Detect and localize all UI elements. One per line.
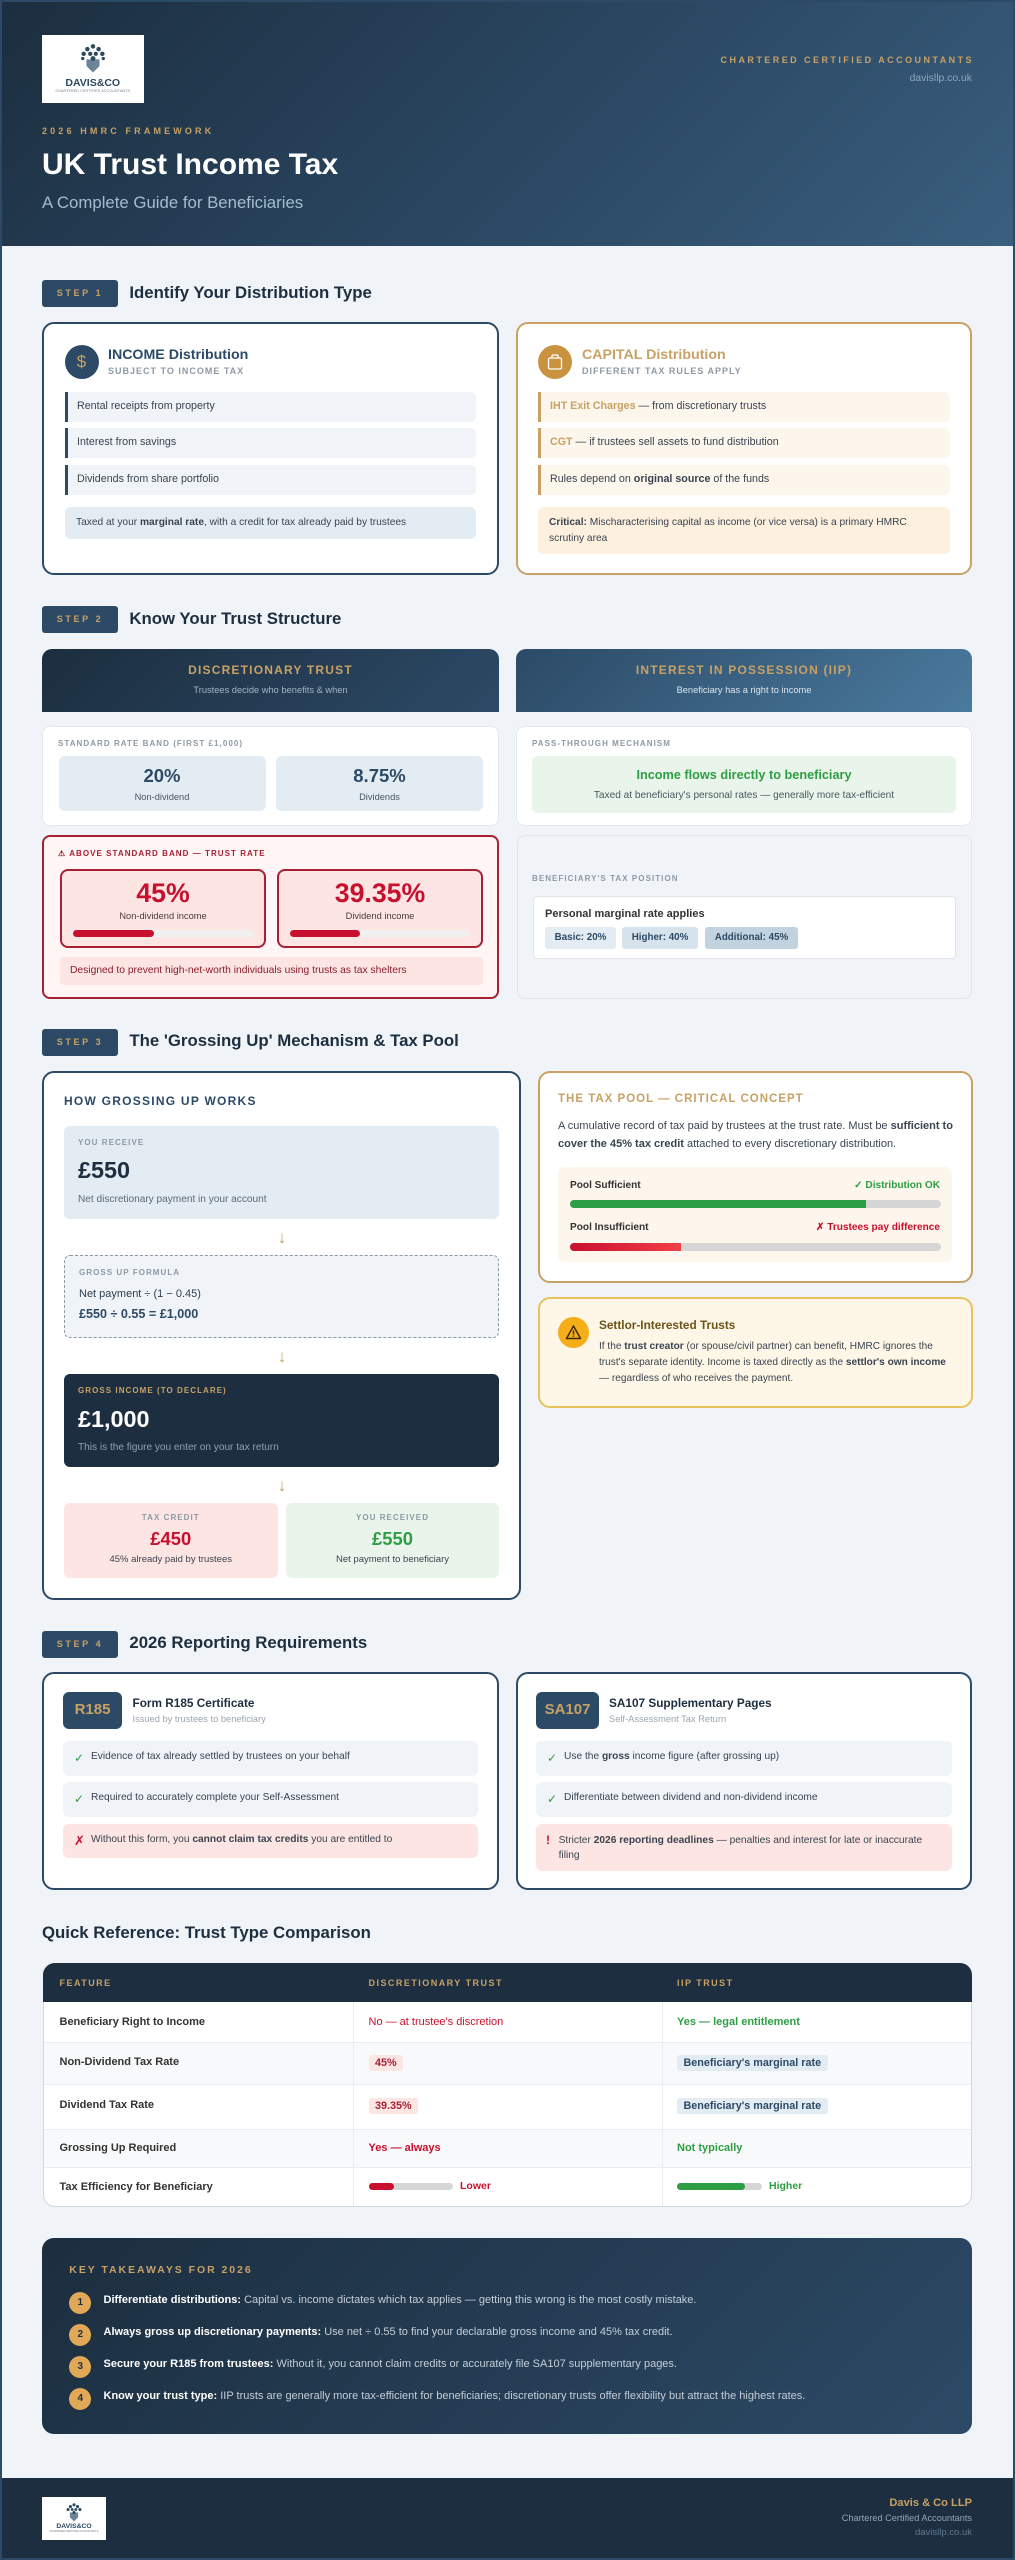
step 1 badge: STEP 1 bbox=[57, 288, 103, 298]
row: dividend rate: Dividend Tax Rate bbox=[60, 2099, 154, 2111]
item: Without this form, you cannot claim tax credits you are entitled to bbox=[91, 1834, 392, 1844]
item bbox=[538, 392, 950, 422]
income note bbox=[65, 507, 476, 539]
row: grossing up: Yes — always bbox=[368, 2142, 441, 2154]
heading: THE TAX POOL — CRITICAL CONCEPT bbox=[558, 1093, 804, 1105]
panel: standard rate band bbox=[42, 726, 499, 826]
stat: 45%: 45% bbox=[136, 878, 190, 908]
panel: SA107 bbox=[516, 1672, 972, 1890]
status: ✗ Trustees pay difference bbox=[816, 1222, 940, 1233]
arrow: ↓ bbox=[278, 1476, 286, 1495]
row: non-dividend rate bbox=[60, 2055, 828, 2071]
panel: capital distribution bbox=[516, 322, 972, 575]
capital subheading: DIFFERENT TAX RULES APPLY bbox=[582, 366, 742, 376]
step: gross income: GROSS INCOME (TO DECLARE) bbox=[78, 1386, 227, 1394]
website: davisllp.co.uk bbox=[915, 2527, 972, 2538]
pool meter bbox=[558, 1166, 952, 1262]
item: Interest from savings bbox=[77, 436, 176, 448]
item bbox=[63, 1741, 478, 1776]
logo wordmark: DAVIS&CO bbox=[65, 77, 120, 89]
eyebrow: 2026 HMRC FRAMEWORK bbox=[42, 126, 214, 136]
chip: Higher: 40% bbox=[632, 932, 688, 943]
result: tax credit: £450 bbox=[150, 1528, 191, 1549]
step 3 badge bbox=[42, 1029, 118, 1056]
income subheading: SUBJECT TO INCOME TAX bbox=[108, 366, 244, 376]
takeaway 2: Always gross up discretionary payments: Use net ÷ 0.55 to find your declarable gross income and 45% tax credit. bbox=[104, 2326, 673, 2338]
result: you received: YOU RECEIVED bbox=[356, 1513, 429, 1522]
label: Pool Sufficient bbox=[570, 1180, 641, 1190]
item: Required to accurately complete your Self-Assessment bbox=[91, 1792, 339, 1803]
panel: beneficiary tax position bbox=[517, 835, 972, 999]
stat: 45% bbox=[60, 869, 266, 948]
bar: higher bbox=[677, 2183, 762, 2190]
step: formula bbox=[64, 1255, 499, 1338]
item bbox=[63, 1824, 478, 1858]
row stripe bbox=[44, 2128, 971, 2168]
step 1 badge bbox=[42, 280, 118, 307]
form title: SA107 Supplementary Pages bbox=[609, 1696, 772, 1710]
bar: insufficient bbox=[570, 1242, 940, 1250]
form subtitle: Self-Assessment Tax Return bbox=[609, 1714, 726, 1724]
row: dividend rate: Beneficiary's marginal rate bbox=[684, 2100, 821, 2112]
item: Use the gross income figure (after grossing up) bbox=[564, 1751, 779, 1762]
panel: iip header bbox=[516, 649, 972, 712]
note: Designed to prevent high-net-worth individuals using trusts as tax shelters bbox=[70, 965, 407, 976]
item bbox=[536, 1824, 952, 1870]
step 2 badge: STEP 2 bbox=[57, 614, 103, 624]
label: ⚠ ABOVE STANDARD BAND — TRUST RATE bbox=[58, 849, 266, 858]
column rule bbox=[352, 2002, 354, 2206]
subheading: Beneficiary has a right to income bbox=[677, 685, 811, 695]
step 4 badge: STEP 4 bbox=[57, 1638, 103, 1648]
label: BENEFICIARY'S TAX POSITION bbox=[532, 874, 679, 883]
takeaway 2 bbox=[69, 2324, 673, 2346]
row: efficiency bbox=[60, 2180, 802, 2193]
header row: IIP TRUST bbox=[677, 1978, 734, 1988]
step: formula: £550 ÷ 0.55 = £1,000 bbox=[79, 1307, 198, 1321]
step: you receive: £550 bbox=[78, 1157, 130, 1183]
stat: 45%: Non-dividend income bbox=[119, 911, 207, 921]
strapline: CHARTERED CERTIFIED ACCOUNTANTS bbox=[50, 2530, 98, 2533]
stat: 8.75%: 8.75% bbox=[353, 765, 406, 786]
row: right to income: No — at trustee's discretion bbox=[368, 2016, 503, 2028]
step: you receive: Net discretionary payment in your account bbox=[78, 1194, 267, 1205]
callout: income flows bbox=[532, 756, 956, 813]
critical note bbox=[538, 507, 950, 554]
bar: lower bbox=[368, 2183, 453, 2190]
capital heading: CAPITAL Distribution bbox=[582, 347, 726, 363]
result: tax credit: TAX CREDIT bbox=[142, 1513, 200, 1522]
label: PASS-THROUGH MECHANISM bbox=[532, 739, 671, 748]
icon: dollar: $ bbox=[77, 352, 86, 371]
row: non-dividend rate: Beneficiary's marginal rate bbox=[684, 2057, 821, 2069]
header row bbox=[43, 1963, 972, 2002]
form badge: SA107 bbox=[545, 1701, 590, 1718]
chip bbox=[705, 927, 798, 949]
takeaway 3: 3 bbox=[78, 2361, 83, 2372]
subheading: Trustees decide who benefits & when bbox=[193, 685, 348, 695]
arrow: ↓ bbox=[278, 1228, 286, 1247]
step: gross income: £1,000 bbox=[78, 1406, 150, 1432]
header row: FEATURE bbox=[60, 1978, 112, 1988]
status: ✓ Distribution OK bbox=[854, 1180, 940, 1190]
income note: Taxed at your marginal rate, with a credit for tax already paid by trustees bbox=[76, 517, 406, 528]
footer bbox=[0, 2478, 1015, 2560]
item: Evidence of tax already settled by trustees on your behalf bbox=[91, 1751, 350, 1762]
takeaway 3: Secure your R185 from trustees: Without it, you cannot claim credits or accurately file SA107 supplementary pages. bbox=[104, 2358, 677, 2370]
heading: KEY TAKEAWAYS FOR 2026 bbox=[69, 2264, 253, 2276]
takeaway 4: 4 bbox=[78, 2393, 83, 2404]
result: you received: £550 bbox=[372, 1528, 413, 1549]
row: efficiency: Tax Efficiency for Beneficiary bbox=[60, 2181, 213, 2193]
panel: above standard band bbox=[42, 835, 499, 999]
note bbox=[60, 957, 483, 985]
stat: 8.75% bbox=[276, 756, 483, 811]
takeaway 2: 2 bbox=[78, 2328, 83, 2340]
step: gross income bbox=[64, 1374, 499, 1467]
row: right to income: Beneficiary Right to Income bbox=[60, 2016, 205, 2028]
chip: Basic: 20% bbox=[555, 932, 606, 943]
step 2 heading: Know Your Trust Structure bbox=[129, 609, 341, 628]
row stripe bbox=[44, 2042, 971, 2085]
row: non-dividend rate: Non-Dividend Tax Rate bbox=[60, 2056, 179, 2068]
result: you received: Net payment to beneficiary bbox=[336, 1554, 449, 1565]
item: CGT — if trustees sell assets to fund distribution bbox=[550, 436, 779, 448]
arrow: ↓ bbox=[278, 1347, 286, 1366]
icon: crest bbox=[66, 2503, 82, 2522]
row: efficiency: Higher bbox=[769, 2180, 802, 2192]
icon: briefcase bbox=[538, 345, 572, 379]
takeaway 1: Differentiate distributions: Capital vs. income dictates which tax applies — getting this wrong is the most costly mistake. bbox=[104, 2294, 696, 2306]
header banner bbox=[0, 0, 1015, 246]
step 3 badge: STEP 3 bbox=[57, 1037, 103, 1047]
item bbox=[65, 392, 476, 422]
step 1 heading: Identify Your Distribution Type bbox=[129, 283, 372, 302]
header row: DISCRETIONARY TRUST bbox=[368, 1978, 503, 1988]
row: efficiency: Lower bbox=[460, 2180, 491, 2192]
item: ! bbox=[546, 1832, 550, 1846]
row: right to income bbox=[60, 2016, 800, 2028]
stat: 8.75%: Dividends bbox=[359, 792, 400, 802]
chip bbox=[622, 927, 698, 949]
step: you receive: YOU RECEIVE bbox=[78, 1138, 144, 1147]
critical note: Critical: Mischaracterising capital as income (or vice versa) is a primary HMRC scrutiny area bbox=[549, 517, 907, 544]
heading: DISCRETIONARY TRUST bbox=[188, 663, 353, 677]
chip bbox=[545, 927, 616, 949]
step: formula: Net payment ÷ (1 − 0.45) bbox=[79, 1288, 201, 1300]
rates heading: Personal marginal rate applies bbox=[545, 908, 705, 920]
row: dividend rate: 39.35% bbox=[375, 2100, 412, 2112]
panel: R185 bbox=[42, 1672, 499, 1890]
stat: 20%: 20% bbox=[143, 765, 181, 786]
item: Stricter 2026 reporting deadlines — penalties and interest for late or inaccurate filing bbox=[559, 1834, 922, 1860]
item bbox=[65, 428, 476, 458]
wordmark: DAVIS&CO bbox=[56, 2523, 92, 2530]
firm descriptor: CHARTERED CERTIFIED ACCOUNTANTS bbox=[721, 55, 974, 65]
heading: INTEREST IN POSSESSION (IIP) bbox=[636, 663, 852, 677]
heading: Settlor-Interested Trusts bbox=[599, 1318, 735, 1332]
form badge bbox=[536, 1692, 599, 1728]
item: IHT Exit Charges — from discretionary trusts bbox=[550, 400, 766, 412]
heading: HOW GROSSING UP WORKS bbox=[64, 1094, 257, 1108]
website: davisllp.co.uk bbox=[910, 73, 972, 84]
form title: Form R185 Certificate bbox=[132, 1696, 254, 1710]
callout: income flows: Taxed at beneficiary's personal rates — generally more tax-efficient bbox=[594, 790, 894, 801]
logo bbox=[42, 35, 144, 103]
row: dividend rate bbox=[60, 2098, 828, 2114]
item: ✓ bbox=[74, 1792, 84, 1806]
result: tax credit bbox=[64, 1503, 278, 1578]
takeaway 1: 1 bbox=[78, 2296, 83, 2308]
step 3 heading: The 'Grossing Up' Mechanism & Tax Pool bbox=[129, 1031, 459, 1050]
bar bbox=[73, 930, 253, 937]
description: A cumulative record of tax paid by trustees at the trust rate. Must be sufficient to cover the 45% tax credit attached to every discretionary distribution. bbox=[558, 1120, 953, 1150]
step: you receive bbox=[64, 1126, 499, 1219]
result: tax credit: 45% already paid by trustees bbox=[109, 1554, 232, 1565]
form subtitle: Issued by trustees to beneficiary bbox=[132, 1714, 266, 1724]
callout: income flows: Income flows directly to beneficiary bbox=[636, 768, 852, 782]
icon: warning bbox=[558, 1317, 589, 1348]
takeaway 4: Know your trust type: IIP trusts are generally more tax-efficient for beneficiaries; discretionary trusts offer flexibility but attract the highest rates. bbox=[104, 2390, 805, 2402]
item: ✓ bbox=[547, 1751, 557, 1765]
bar: sufficient bbox=[570, 1200, 940, 1208]
item: ✓ bbox=[74, 1751, 84, 1765]
firm descriptor: Chartered Certified Accountants bbox=[842, 2513, 972, 2523]
rates box bbox=[533, 896, 956, 959]
takeaway 3 bbox=[69, 2356, 677, 2378]
step: formula: GROSS UP FORMULA bbox=[79, 1268, 180, 1277]
takeaway 1 bbox=[69, 2292, 696, 2314]
logo strapline: CHARTERED CERTIFIED ACCOUNTANTS bbox=[56, 89, 130, 93]
chip: Additional: 45% bbox=[715, 932, 788, 943]
step: gross income: This is the figure you enter on your tax return bbox=[78, 1442, 279, 1452]
panel: tax pool bbox=[538, 1071, 973, 1283]
stat: 39.35% bbox=[277, 869, 483, 948]
panel: how grossing up works bbox=[42, 1071, 521, 1600]
item bbox=[536, 1782, 952, 1816]
row: right to income: Yes — legal entitlement bbox=[677, 2016, 800, 2028]
takeaway 4 bbox=[69, 2388, 805, 2410]
label: Pool Insufficient bbox=[570, 1222, 649, 1233]
bar bbox=[290, 930, 470, 937]
form badge bbox=[63, 1692, 122, 1728]
panel: key takeaways bbox=[42, 2238, 972, 2434]
description: If the trust creator (or spouse/civil partner) can benefit, HMRC ignores the trust's separate identity. Income is taxed directly as the settlor's own income — regardless of who receives the payment. bbox=[599, 1341, 946, 1384]
form badge: R185 bbox=[75, 1701, 110, 1718]
step 4 heading: 2026 Reporting Requirements bbox=[129, 1633, 367, 1652]
item bbox=[538, 428, 950, 458]
income heading: INCOME Distribution bbox=[108, 347, 248, 363]
row: grossing up: Grossing Up Required bbox=[60, 2142, 176, 2154]
column rule bbox=[662, 2002, 663, 2206]
item bbox=[63, 1782, 478, 1816]
row: non-dividend rate: 45% bbox=[375, 2057, 397, 2069]
icon: crest bbox=[81, 44, 105, 72]
panel: discretionary trust header bbox=[42, 649, 499, 712]
item: Dividends from share portfolio bbox=[77, 473, 219, 485]
panel: settlor-interested trusts bbox=[538, 1297, 973, 1408]
item: ✗ bbox=[74, 1832, 85, 1848]
item bbox=[536, 1741, 952, 1776]
icon: dollar bbox=[64, 345, 98, 379]
label: STANDARD RATE BAND (FIRST £1,000) bbox=[58, 739, 243, 748]
item bbox=[65, 465, 476, 494]
item: Rules depend on original source of the funds bbox=[550, 473, 769, 485]
panel: income distribution bbox=[42, 322, 499, 575]
result: you received bbox=[286, 1503, 499, 1578]
stat: 39.35%: 39.35% bbox=[335, 878, 425, 908]
firm name: Davis & Co LLP bbox=[889, 2497, 972, 2509]
step 4 badge bbox=[42, 1630, 118, 1658]
row: grossing up bbox=[60, 2142, 742, 2154]
item bbox=[538, 465, 950, 494]
subtitle: A Complete Guide for Beneficiaries bbox=[42, 193, 303, 212]
title: UK Trust Income Tax bbox=[42, 148, 338, 181]
comparison table bbox=[43, 1963, 972, 2207]
stat: 20% bbox=[58, 756, 266, 811]
footer logo bbox=[42, 2497, 106, 2540]
item: Rental receipts from property bbox=[77, 400, 215, 412]
stat: 39.35%: Dividend income bbox=[346, 911, 414, 921]
row: grossing up: Not typically bbox=[677, 2142, 742, 2154]
panel: pass-through mechanism bbox=[516, 726, 972, 826]
item: Differentiate between dividend and non-dividend income bbox=[564, 1792, 818, 1803]
stat: 20%: Non-dividend bbox=[135, 792, 189, 802]
item: ✓ bbox=[547, 1792, 557, 1806]
step 2 badge bbox=[42, 606, 118, 633]
quick reference heading: Quick Reference: Trust Type Comparison bbox=[42, 1923, 371, 1942]
